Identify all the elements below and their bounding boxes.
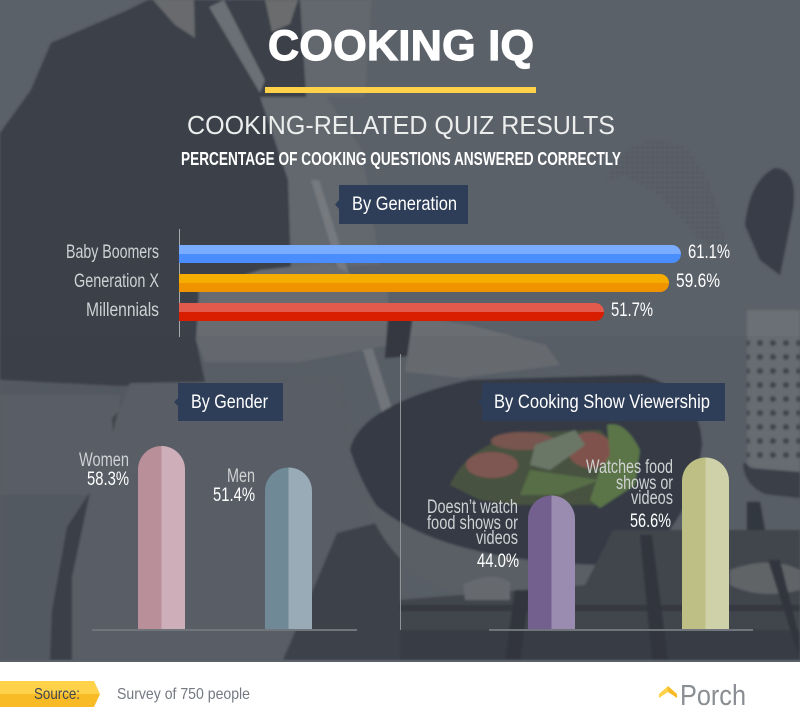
- panel: by gender: [79, 383, 357, 631]
- apron skirt: [129, 382, 190, 386]
- bar: Watches: videos: [631, 488, 673, 509]
- bar: Millennials: Millennials: [86, 300, 159, 321]
- bar: Generation X: Generation X: [74, 271, 159, 292]
- bar: Baby Boomers: 61.1%: [688, 242, 730, 263]
- axis line: [179, 229, 180, 337]
- bar: Men: Men: [227, 466, 255, 487]
- dark clothing: [283, 517, 400, 660]
- spatula handle: [311, 180, 394, 420]
- description: PERCENTAGE OF COOKING QUESTIONS ANSWERED CORRECTLY: [181, 149, 621, 169]
- wok: [350, 375, 702, 585]
- bar: Women: 58.3%: [87, 469, 129, 490]
- heading tag: By Gender: By Gender: [191, 392, 269, 413]
- heading tag: By Gender: [174, 383, 283, 421]
- shirt: [300, 2, 326, 95]
- bar: Watches: 56.6%: [630, 511, 671, 532]
- heading tag: By Cooking Show Viewership: By Cooking Show Viewership: [494, 392, 710, 413]
- bar: Generation X: 59.6%: [676, 271, 720, 292]
- stove surface: [400, 530, 800, 630]
- apron strap: [209, 0, 265, 93]
- source text: Survey of 750 people: [117, 686, 250, 703]
- source tag: [0, 681, 100, 707]
- fabric crease: [112, 414, 118, 429]
- bar: Women: [79, 446, 185, 629]
- logo: Porch: [659, 680, 746, 712]
- skimmer: [745, 168, 794, 275]
- title: COOKING IQ: [268, 22, 534, 70]
- grates: [640, 535, 664, 629]
- bar: Women: Women: [79, 450, 129, 471]
- bar: Watches: Watches food: [586, 457, 673, 478]
- bar: Doesn't watch: food shows or: [427, 513, 519, 534]
- footer: [0, 660, 800, 726]
- bar: Doesn't watch: 44.0%: [477, 551, 519, 572]
- bar: Doesn't watch: videos: [476, 528, 518, 549]
- source tag: Source:: [34, 686, 80, 703]
- bar: Watches: [586, 457, 729, 629]
- bar: Generation X: [74, 271, 720, 292]
- title underline: [265, 87, 536, 93]
- vertical divider: [400, 354, 401, 630]
- apron bib: [260, 98, 340, 264]
- bar: Millennials: 51.7%: [611, 300, 653, 321]
- baseline: [92, 629, 357, 631]
- heading tag: By Generation: By Generation: [352, 194, 457, 215]
- bar: Baby Boomers: Baby Boomers: [66, 242, 159, 263]
- dark seam left: [50, 492, 90, 660]
- heading tag: By Generation: [335, 185, 468, 224]
- bar: Men: 51.4%: [213, 485, 255, 506]
- panel: by cooking show viewership: [427, 383, 753, 631]
- bar: Men: [213, 466, 312, 629]
- lower photo shade: [0, 336, 800, 660]
- bar: Millennials: [86, 300, 653, 321]
- panel: by generation: [66, 185, 730, 337]
- wall panel lower left: [0, 382, 130, 660]
- colander top right: [607, 142, 725, 250]
- heading tag: By Cooking Show Viewership: [478, 383, 725, 421]
- hair: [153, 0, 195, 38]
- bar: Watches: shows or: [616, 473, 674, 494]
- utensil holder: [747, 310, 800, 490]
- right forearm: [406, 321, 558, 378]
- dark watch strap: [384, 321, 413, 359]
- burners: [463, 577, 510, 600]
- food: [450, 430, 640, 505]
- bar: Baby Boomers: [66, 242, 730, 263]
- subtitle: COOKING-RELATED QUIZ RESULTS: [187, 110, 615, 140]
- sweater: [0, 0, 306, 386]
- logo: Porch: Porch: [680, 680, 746, 712]
- bar: Doesn't watch: Doesn’t watch: [427, 497, 518, 518]
- left hand: [196, 263, 390, 362]
- baseline: [489, 629, 753, 631]
- bar: Doesn't watch: [427, 496, 575, 629]
- wok outer band: [375, 506, 596, 584]
